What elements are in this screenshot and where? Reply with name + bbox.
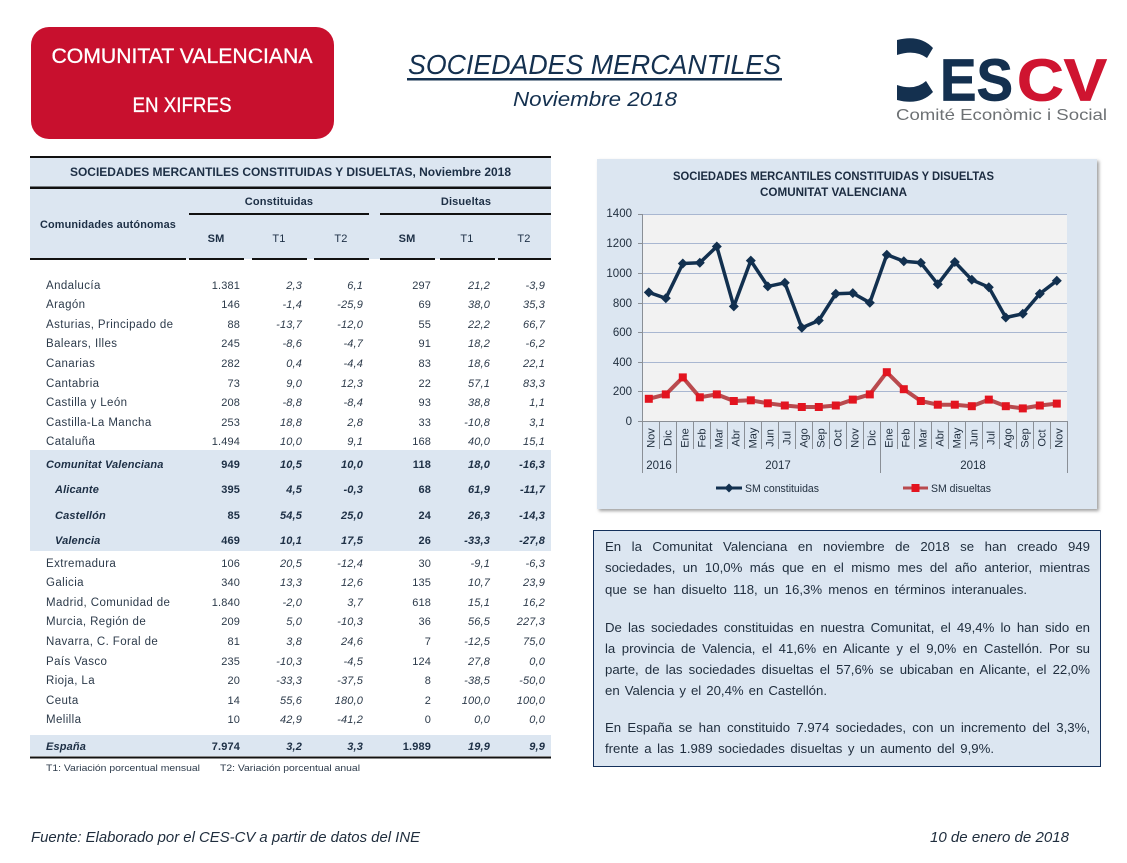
row: Andalucía: 1.381 bbox=[212, 280, 240, 292]
row: Ceuta: 14 bbox=[227, 695, 240, 707]
series: SM constituidas bbox=[649, 246, 1057, 328]
row: Cantabria: 9,0 bbox=[286, 378, 303, 390]
row: Ceuta bbox=[46, 695, 546, 707]
row: País Vasco: -10,3 bbox=[276, 656, 303, 668]
row: Asturias: -13,7 bbox=[276, 319, 303, 331]
table footnote: T2: Variación porcentual anual bbox=[220, 763, 360, 774]
row: Melilla: 0,0 bbox=[474, 714, 491, 726]
x axis month labels: Sep bbox=[816, 428, 828, 448]
row: Murcia: 227,3 bbox=[516, 616, 546, 628]
row: Murcia: 56,5 bbox=[468, 616, 491, 628]
paragraph 3: En España se han constituido 7.974 sociedades, con un incremento del 3,3%, bbox=[605, 720, 1090, 735]
row: Rioja: Rioja, La bbox=[46, 675, 95, 687]
row: Navarra: 24,6 bbox=[340, 636, 364, 648]
x axis month labels: Jun bbox=[968, 429, 980, 447]
row: Cataluña: 1.494 bbox=[212, 436, 240, 448]
row: Valencia: 26 bbox=[418, 535, 431, 547]
table column headers: SM bbox=[399, 233, 415, 245]
row: Andalucía: 21,2 bbox=[467, 280, 490, 292]
row: Asturias: 22,2 bbox=[467, 319, 490, 331]
row: Castilla y León bbox=[46, 397, 545, 409]
row: Andalucía: 297 bbox=[412, 280, 431, 292]
row: Alicante: 61,9 bbox=[468, 484, 491, 496]
x axis year labels: 2018 bbox=[960, 460, 986, 472]
row: Cantabria bbox=[46, 378, 546, 390]
row: Ceuta: 180,0 bbox=[335, 695, 364, 707]
row: Ceuta: Ceuta bbox=[46, 695, 79, 707]
row: País Vasco: País Vasco bbox=[46, 656, 107, 668]
row: Cataluña: 15,1 bbox=[523, 436, 545, 448]
row: Extremadura: -12,4 bbox=[337, 558, 363, 570]
table footnote: T1: Variación porcentual mensual bbox=[46, 763, 200, 774]
row: Castellón: 54,5 bbox=[280, 510, 303, 522]
row: Extremadura: 106 bbox=[221, 558, 240, 570]
badge: Comunitat Valenciana en xifres bbox=[31, 27, 334, 139]
source note: Fuente: Elaborado por el CES-CV a partir de datos del INE bbox=[31, 829, 421, 846]
row: Cantabria: Cantabria bbox=[46, 378, 100, 390]
x axis month labels bbox=[646, 427, 1066, 448]
table column headers: Constituidas bbox=[245, 196, 313, 208]
x axis month labels: Mar bbox=[918, 428, 930, 447]
row: Castilla-La Mancha: 2,8 bbox=[346, 417, 364, 429]
badge: Comunitat Valenciana en xifres: EN XIFRES bbox=[132, 94, 232, 117]
row: Rioja: 8 bbox=[425, 675, 431, 687]
row: Madrid: Madrid, Comunidad de bbox=[46, 597, 170, 609]
row: Galicia: 10,7 bbox=[468, 577, 491, 589]
row: Balears: 91 bbox=[418, 338, 431, 350]
row: Extremadura: Extremadura bbox=[46, 558, 116, 570]
row: Castellón bbox=[55, 510, 545, 522]
row: España bbox=[46, 741, 546, 753]
row: Rioja: -37,5 bbox=[337, 675, 364, 687]
legend: SM constituidas bbox=[745, 483, 819, 495]
row: Ceuta: 100,0 bbox=[462, 695, 491, 707]
paragraph 2: parte, de las sociedades disueltas el 57,6% se ubicaban en Alicante, el 22,0% bbox=[605, 662, 1090, 677]
row: Melilla: 0 bbox=[425, 714, 431, 726]
paragraph 2: De las sociedades constituidas en nuestra Comunitat, el 49,4% lo han sido en bbox=[605, 620, 1090, 635]
row: Ceuta: 55,6 bbox=[280, 695, 303, 707]
row: Castilla-La Mancha bbox=[46, 417, 545, 429]
row: Andalucía: -3,9 bbox=[525, 280, 545, 292]
row: Cantabria: 73 bbox=[227, 378, 240, 390]
series: SM disueltas bbox=[649, 372, 1057, 408]
row: Castilla-La Mancha: Castilla-La Mancha bbox=[46, 417, 152, 429]
logo: CES CV: ES bbox=[940, 48, 1013, 114]
row: Asturias bbox=[46, 319, 546, 331]
x axis month labels: Jul bbox=[986, 431, 998, 445]
table column headers bbox=[40, 196, 531, 245]
chart title: COMUNITAT VALENCIANA bbox=[760, 187, 907, 199]
row: Asturias: Asturias, Principado de bbox=[46, 319, 173, 331]
x axis month labels: Dic bbox=[662, 430, 674, 446]
row: Castilla-La Mancha: -10,8 bbox=[464, 417, 491, 429]
row: Cantabria: 57,1 bbox=[468, 378, 490, 390]
row: Extremadura bbox=[46, 558, 546, 570]
row: Valencia: -33,3 bbox=[464, 535, 490, 547]
row: Castilla-La Mancha: 18,8 bbox=[280, 417, 303, 429]
row: Asturias: -12,0 bbox=[337, 319, 364, 331]
row: Melilla: -41,2 bbox=[337, 714, 363, 726]
legend bbox=[716, 483, 991, 495]
row: Alicante: 395 bbox=[221, 484, 240, 496]
row: Alicante: Alicante bbox=[54, 484, 99, 496]
row: Asturias: 66,7 bbox=[523, 319, 546, 331]
date: 10 de enero de 2018 bbox=[930, 829, 1070, 846]
row: Cataluña: 9,1 bbox=[347, 436, 363, 448]
row: Comunitat Valenciana: 10,5 bbox=[280, 459, 303, 471]
row: Navarra: 75,0 bbox=[523, 636, 546, 648]
x axis month labels: Abr bbox=[934, 429, 946, 447]
row: Comunitat Valenciana: Comunitat Valenciana bbox=[46, 459, 164, 471]
row: España: 3,3 bbox=[347, 741, 363, 753]
logo: CES CV bbox=[896, 38, 1107, 124]
row: Extremadura: 20,5 bbox=[279, 558, 303, 570]
row: Galicia: 12,6 bbox=[341, 577, 364, 589]
row: Madrid bbox=[46, 597, 545, 609]
row: Valencia: 469 bbox=[221, 535, 240, 547]
row: Murcia: -10,3 bbox=[337, 616, 364, 628]
row: Balears: -4,7 bbox=[343, 338, 364, 350]
row: Aragón: 35,3 bbox=[523, 299, 546, 311]
paragraph 1: sociedades, un 10,0% más que en el mismo mes del año anterior, mientras bbox=[605, 560, 1090, 575]
row: Valencia: Valencia bbox=[55, 535, 100, 547]
row: Navarra: 3,8 bbox=[286, 636, 303, 648]
row: Navarra: -12,5 bbox=[464, 636, 491, 648]
row: Alicante: 68 bbox=[418, 484, 431, 496]
paragraph 1: En la Comunitat Valenciana en noviembre de 2018 se han creado 949 bbox=[605, 539, 1090, 554]
row: Madrid: 15,1 bbox=[468, 597, 490, 609]
text panel: commentary bbox=[593, 530, 1101, 767]
x axis month labels: Jun bbox=[764, 429, 776, 447]
x axis month labels: May bbox=[748, 427, 760, 448]
row: Comunitat Valenciana: 18,0 bbox=[468, 459, 491, 471]
table column headers: Comunidades autónomas bbox=[40, 219, 176, 231]
row: Aragón: -25,9 bbox=[337, 299, 363, 311]
row: Castilla y León: -8,4 bbox=[343, 397, 363, 409]
legend: SM disueltas bbox=[931, 483, 991, 495]
row: España: 3,2 bbox=[286, 741, 302, 753]
y axis labels: 1200 bbox=[606, 238, 632, 250]
row: Madrid: 618 bbox=[412, 597, 431, 609]
row: Castilla y León: 93 bbox=[418, 397, 431, 409]
row: Galicia: 340 bbox=[221, 577, 240, 589]
x axis month labels: Nov bbox=[1054, 428, 1066, 448]
x axis year labels bbox=[646, 460, 986, 472]
table heading: SOCIEDADES MERCANTILES CONSTITUIDAS Y DISUELTAS, Noviembre 2018 bbox=[70, 165, 511, 179]
row: Canarias: -4,4 bbox=[343, 358, 363, 370]
table footnote bbox=[46, 763, 360, 774]
row: Comunitat Valenciana: -16,3 bbox=[519, 459, 545, 471]
x axis month labels: Sep bbox=[1020, 428, 1032, 448]
paragraph 1: que se han disuelto 118, un 16,3% menos en términos interanuales. bbox=[605, 582, 1027, 597]
row: Ceuta: 100,0 bbox=[517, 695, 546, 707]
row: Murcia: Murcia, Región de bbox=[46, 616, 146, 628]
row: País Vasco: 0,0 bbox=[529, 656, 546, 668]
row: Cantabria: 22 bbox=[418, 378, 431, 390]
row: Castellón: 85 bbox=[227, 510, 240, 522]
row: Andalucía: Andalucía bbox=[46, 280, 101, 292]
row: País Vasco bbox=[46, 656, 546, 668]
row: Castilla y León: 208 bbox=[221, 397, 240, 409]
x axis month labels: Oct bbox=[1036, 429, 1048, 447]
row: Melilla: 10 bbox=[227, 714, 240, 726]
row: Aragón bbox=[46, 299, 546, 311]
paragraph 3 bbox=[605, 720, 1090, 756]
row: Valencia: -27,8 bbox=[519, 535, 546, 547]
row: Alicante: 4,5 bbox=[285, 484, 303, 496]
badge: Comunitat Valenciana en xifres: COMUNITAT VALENCIANA bbox=[52, 45, 312, 68]
row: Castilla-La Mancha: 33 bbox=[418, 417, 431, 429]
x axis month labels: Nov bbox=[850, 428, 862, 448]
y axis labels: 400 bbox=[613, 357, 632, 369]
paragraph 2 bbox=[605, 620, 1090, 698]
row: Aragón: Aragón bbox=[46, 299, 85, 311]
table column headers: T1 bbox=[460, 233, 474, 245]
plot area and grid bbox=[642, 214, 1067, 421]
row: Asturias: 88 bbox=[227, 319, 240, 331]
table column headers: SM bbox=[208, 233, 224, 245]
row: Castellón: -14,3 bbox=[519, 510, 545, 522]
row: País Vasco: -4,5 bbox=[343, 656, 364, 668]
row: Rioja: -50,0 bbox=[519, 675, 546, 687]
x axis month labels: Oct bbox=[832, 429, 844, 447]
row: Comunitat Valenciana: 10,0 bbox=[341, 459, 364, 471]
row: Canarias: 0,4 bbox=[286, 358, 302, 370]
row: Alicante bbox=[54, 484, 546, 496]
row: Balears: -8,6 bbox=[282, 338, 303, 350]
y axis labels: 0 bbox=[626, 416, 632, 428]
row: Valencia: 17,5 bbox=[341, 535, 364, 547]
logo: CES CV: Comité Econòmic i Social bbox=[896, 107, 1107, 124]
row: Asturias: 55 bbox=[418, 319, 431, 331]
row: España: 7.974 bbox=[212, 741, 241, 753]
row: Castilla y León: Castilla y León bbox=[46, 397, 127, 409]
row: Aragón: 146 bbox=[221, 299, 240, 311]
row: País Vasco: 235 bbox=[221, 656, 240, 668]
row: Balears bbox=[46, 338, 545, 350]
row: Comunitat Valenciana bbox=[46, 459, 545, 471]
row: Canarias: 22,1 bbox=[522, 358, 545, 370]
row: Castilla y León: 38,8 bbox=[468, 397, 491, 409]
row: Valencia: 10,1 bbox=[280, 535, 302, 547]
x axis month labels: Dic bbox=[866, 430, 878, 446]
row: Castilla-La Mancha: 253 bbox=[221, 417, 240, 429]
row: Galicia bbox=[46, 577, 545, 589]
row: Cataluña bbox=[46, 436, 545, 448]
row: Murcia: 5,0 bbox=[286, 616, 303, 628]
x axis month labels: Abr bbox=[730, 429, 742, 447]
row: Navarra: 7 bbox=[425, 636, 431, 648]
panel: line chart bbox=[597, 159, 1097, 509]
row: Melilla bbox=[46, 714, 546, 726]
row: Aragón: 69 bbox=[418, 299, 431, 311]
row: Rioja: -33,3 bbox=[276, 675, 303, 687]
table column headers: T2 bbox=[334, 233, 348, 245]
y axis labels: 800 bbox=[613, 298, 632, 310]
paragraph 2: la provincia de Valencia, el 41,6% en Alicante y el 9,0% en Castellón. Por su bbox=[605, 641, 1090, 656]
chart title bbox=[673, 171, 994, 199]
x axis month labels: Feb bbox=[900, 429, 912, 447]
row: Cataluña: 10,0 bbox=[280, 436, 303, 448]
row: Rioja: 20 bbox=[227, 675, 240, 687]
row: Navarra bbox=[46, 636, 546, 648]
row: Galicia: 135 bbox=[412, 577, 431, 589]
row: Cantabria: 83,3 bbox=[523, 378, 546, 390]
row: Andalucía: 2,3 bbox=[285, 280, 303, 292]
row: Rioja: -38,5 bbox=[464, 675, 491, 687]
row: Cataluña: 168 bbox=[412, 436, 431, 448]
title: SOCIEDADES MERCANTILES bbox=[408, 49, 781, 80]
row: Castilla y León: 1,1 bbox=[529, 397, 545, 409]
y axis labels: 600 bbox=[613, 327, 632, 339]
paragraph 3: frente a las 1.989 sociedades disueltas y un aumento del 9,9%. bbox=[605, 741, 994, 756]
panel: data table bbox=[30, 156, 551, 774]
subtitle: Noviembre 2018 bbox=[513, 89, 677, 111]
row: Canarias: Canarias bbox=[46, 358, 95, 370]
row: Castellón: Castellón bbox=[55, 510, 106, 522]
row: Canarias: 282 bbox=[221, 358, 240, 370]
row: País Vasco: 124 bbox=[412, 656, 431, 668]
row: Galicia: 13,3 bbox=[280, 577, 303, 589]
row: Navarra: Navarra, C. Foral de bbox=[46, 636, 158, 648]
row: Balears: 18,2 bbox=[468, 338, 490, 350]
row: España: 19,9 bbox=[468, 741, 491, 753]
x axis month labels: Ene bbox=[884, 428, 896, 448]
paragraph 2: en Valencia y el 20,4% en Castellón. bbox=[605, 683, 827, 698]
x axis month labels: Jul bbox=[782, 431, 794, 445]
row: Castellón: 26,3 bbox=[467, 510, 490, 522]
row: Castilla y León: -8,8 bbox=[282, 397, 303, 409]
x axis year labels: 2016 bbox=[646, 460, 672, 472]
row: Navarra: 81 bbox=[227, 636, 240, 648]
x axis year labels: 2017 bbox=[765, 460, 791, 472]
row: Balears: 245 bbox=[221, 338, 240, 350]
table column headers: T2 bbox=[517, 233, 531, 245]
row: Madrid: -2,0 bbox=[282, 597, 303, 609]
y axis labels: 200 bbox=[613, 386, 632, 398]
x axis month labels: Mar bbox=[714, 428, 726, 447]
x axis month labels: May bbox=[952, 427, 964, 448]
row: Madrid: 1.840 bbox=[212, 597, 240, 609]
y axis labels: 1000 bbox=[606, 268, 632, 280]
chart title: SOCIEDADES MERCANTILES CONSTITUIDAS Y DISUELTAS bbox=[673, 171, 994, 183]
row: Andalucía: 6,1 bbox=[347, 280, 363, 292]
x axis month labels: Ago bbox=[1002, 428, 1014, 448]
row: Murcia: 36 bbox=[418, 616, 431, 628]
row: Galicia: Galicia bbox=[46, 577, 84, 589]
row: Andalucía bbox=[46, 280, 545, 292]
row: Castellón: 25,0 bbox=[340, 510, 364, 522]
row: Melilla: Melilla bbox=[46, 714, 82, 726]
row: Cataluña: Cataluña bbox=[46, 436, 95, 448]
row: Extremadura: -6,3 bbox=[525, 558, 546, 570]
row: Melilla: 42,9 bbox=[280, 714, 302, 726]
x axis month labels: Ago bbox=[798, 428, 810, 448]
row: Balears: Balears, Illes bbox=[46, 338, 117, 350]
row: Balears: -6,2 bbox=[525, 338, 545, 350]
row: España: 1.989 bbox=[403, 741, 431, 753]
row: Comunitat Valenciana: 949 bbox=[221, 459, 240, 471]
x axis month labels: Feb bbox=[696, 429, 708, 447]
row: Canarias bbox=[46, 358, 545, 370]
table column headers: Disueltas bbox=[441, 196, 491, 208]
row: España: 9,9 bbox=[529, 741, 546, 753]
x axis month labels: Ene bbox=[680, 428, 692, 448]
logo: CES CV: CV bbox=[1017, 48, 1107, 114]
row: Castellón: 24 bbox=[418, 510, 432, 522]
row: Valencia bbox=[55, 535, 546, 547]
y axis labels: 1400 bbox=[606, 208, 632, 220]
row: Castilla-La Mancha: 3,1 bbox=[529, 417, 545, 429]
row: Alicante: -0,3 bbox=[343, 484, 363, 496]
row: Canarias: 83 bbox=[418, 358, 431, 370]
row: Madrid: 3,7 bbox=[347, 597, 364, 609]
row: Melilla: 0,0 bbox=[529, 714, 546, 726]
row: Aragón: 38,0 bbox=[468, 299, 491, 311]
row: España: España bbox=[46, 741, 86, 753]
table column headers: T1 bbox=[272, 233, 286, 245]
row: Cantabria: 12,3 bbox=[341, 378, 364, 390]
row: Murcia bbox=[46, 616, 546, 628]
y axis labels bbox=[606, 208, 632, 428]
row: Canarias: 18,6 bbox=[468, 358, 491, 370]
row: Rioja bbox=[46, 675, 546, 687]
row: País Vasco: 27,8 bbox=[467, 656, 491, 668]
x axis month labels: Nov bbox=[646, 428, 658, 448]
paragraph 1 bbox=[605, 539, 1090, 597]
axes and category separators bbox=[638, 214, 1068, 473]
row: Galicia: 23,9 bbox=[522, 577, 545, 589]
row: Extremadura: -9,1 bbox=[470, 558, 490, 570]
row: Cataluña: 40,0 bbox=[468, 436, 491, 448]
row: Murcia: 209 bbox=[221, 616, 240, 628]
row: Ceuta: 2 bbox=[425, 695, 431, 707]
row: Extremadura: 30 bbox=[418, 558, 431, 570]
row: Alicante: -11,7 bbox=[520, 484, 546, 496]
row: Madrid: 16,2 bbox=[523, 597, 545, 609]
row: Aragón: -1,4 bbox=[282, 299, 302, 311]
row: Comunitat Valenciana: 118 bbox=[413, 459, 431, 471]
